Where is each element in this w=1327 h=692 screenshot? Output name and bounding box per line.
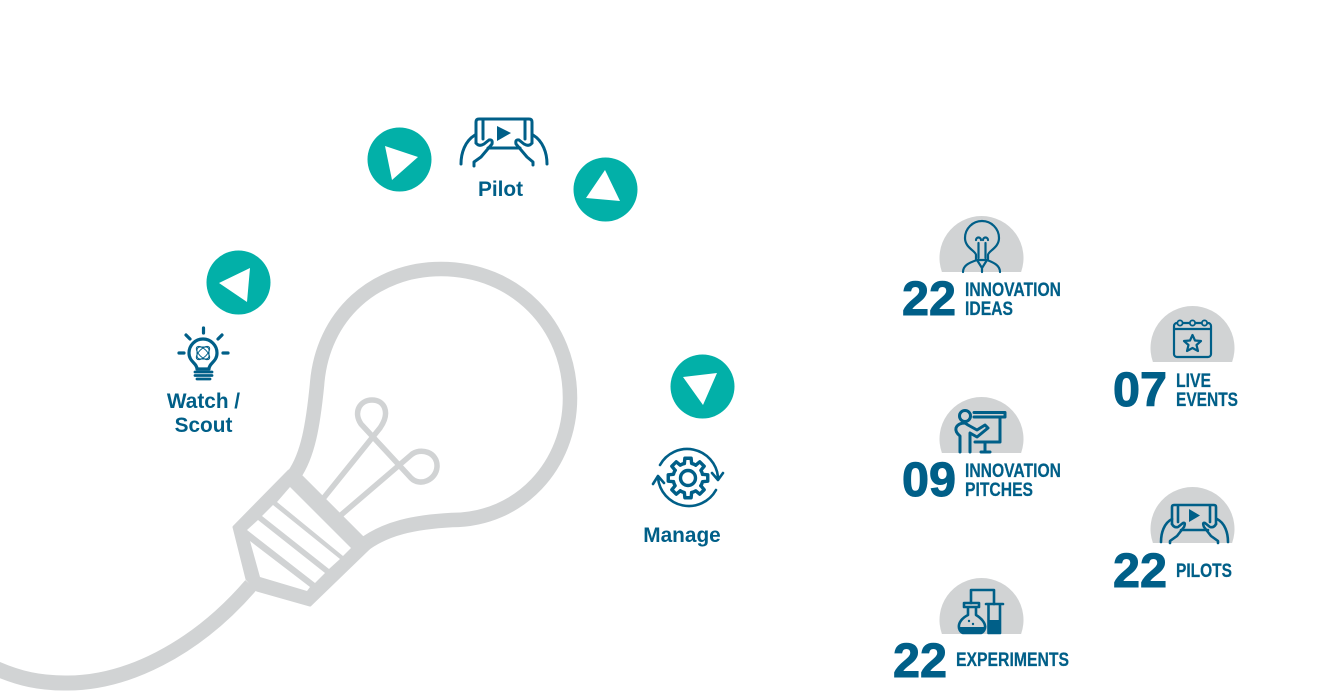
arrow: teal circle pointing up: [574, 158, 638, 222]
icon: grey dome with calendar star: [1150, 306, 1234, 362]
label: manage: Manage: [643, 524, 721, 547]
number: 09: 09: [902, 454, 956, 507]
arrow: teal circle pointing right: [368, 128, 432, 192]
label: watch / scout: Watch /: [167, 390, 240, 413]
stat: innovation ideas: [902, 216, 1061, 326]
label: innovation: INNOVATION: [965, 279, 1061, 301]
number: 22: 22: [893, 635, 947, 688]
step: watch / scout: [167, 328, 240, 437]
label: pitches: PITCHES: [965, 479, 1033, 501]
label: pilot: Pilot: [478, 178, 523, 201]
step: pilot: [461, 119, 547, 201]
number: 07: 07: [1113, 364, 1167, 417]
label: pilots: PILOTS: [1176, 560, 1232, 582]
number: 22: 22: [902, 273, 956, 326]
arrow: teal circle pointing left: [206, 250, 270, 314]
label: ideas: IDEAS: [965, 298, 1013, 320]
number: 22: 22: [1113, 545, 1167, 598]
stat: pilots: [1113, 487, 1234, 598]
icon: grey dome with person bulb head: [940, 216, 1024, 272]
icon: grey dome with lab flask: [940, 578, 1024, 634]
arrow: teal circle pointing down: [670, 354, 734, 418]
stat: innovation pitches: [902, 397, 1061, 507]
step: manage: [643, 449, 723, 547]
stat: experiments: [893, 578, 1069, 688]
icon: grey dome with presenter: [940, 397, 1024, 453]
icon: hands holding phone: [461, 119, 547, 166]
illustration: large grey light bulb: [0, 269, 570, 683]
icon: gear with circular arrows: [653, 449, 723, 506]
label: innovation: INNOVATION: [965, 460, 1061, 482]
label: live: LIVE: [1176, 370, 1211, 392]
icon: grey dome with hands holding phone: [1150, 487, 1234, 543]
label: events: EVENTS: [1176, 389, 1238, 411]
stat: live events: [1113, 306, 1238, 417]
bulb cord: [0, 585, 251, 683]
icon: bulb with atom: [179, 328, 228, 379]
bulb screw base: [234, 471, 371, 605]
label: scout: Scout: [175, 414, 232, 437]
bulb glass outline: [294, 269, 570, 546]
label: experiments: EXPERIMENTS: [956, 649, 1069, 671]
filament: [322, 400, 437, 515]
